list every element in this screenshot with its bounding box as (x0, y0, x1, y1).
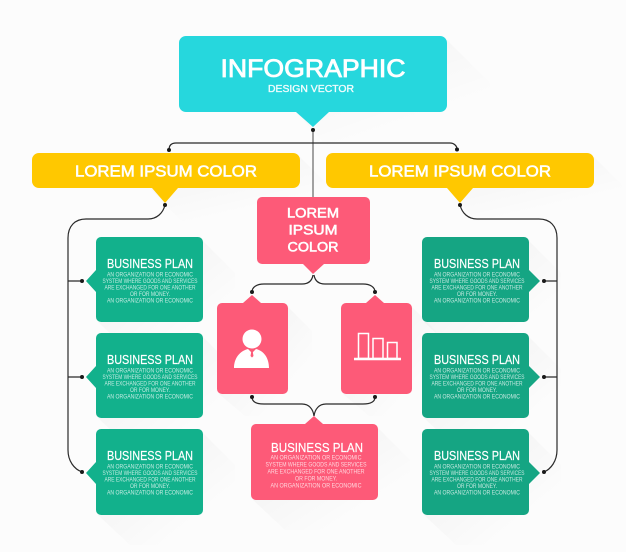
title: INFOGRAPHIC (220, 55, 406, 83)
icon: bar chart (354, 334, 401, 359)
panel: left business plan 2: ARE EXCHANGED FOR ONE ANOTHER (104, 380, 196, 388)
panel: bottom pink business plan: ARE EXCHANGED FOR ONE ANOTHER (268, 468, 365, 476)
panel: left business plan 3: AN ORGANIZATION OR ECONOMIC (107, 490, 193, 496)
panel: right business plan 1: BUSINESS PLAN (434, 256, 520, 271)
panel: left business plan 3: BUSINESS PLAN (107, 448, 193, 463)
panel: left business plan 3: OR FOR MONEY. (130, 483, 170, 490)
panel: centre pink heading (257, 197, 370, 274)
panel: left business plan 2 (86, 333, 203, 418)
panel: left business plan 2: BUSINESS PLAN (107, 352, 193, 367)
panel: left yellow heading: LOREM IPSUM COLOR (75, 164, 257, 180)
title box (179, 36, 447, 127)
panel: right business plan 3: SYSTEM WHERE GOODS AND SERVICES (430, 470, 525, 477)
panel: right yellow heading (326, 153, 594, 203)
panel: left business plan 1: SYSTEM WHERE GOODS AND SERVICES (102, 278, 198, 285)
connector dots (80, 128, 546, 474)
panel: right business plan 1: AN ORGANIZATION OR ECONOMIC (434, 272, 520, 278)
panel: right business plan 2: BUSINESS PLAN (434, 352, 520, 367)
panel: bottom pink business plan (251, 416, 378, 500)
panel: left yellow heading (32, 153, 300, 203)
panel: right business plan 2: AN ORGANIZATION OR ECONOMIC (434, 368, 520, 374)
panel: left business plan 1: AN ORGANIZATION OR ECONOMIC (107, 298, 193, 304)
panel: right business plan 2: ARE EXCHANGED FOR ONE ANOTHER (432, 380, 523, 388)
panel: right business plan 2: SYSTEM WHERE GOODS AND SERVICES (430, 374, 525, 381)
panel: left business plan 2: SYSTEM WHERE GOODS AND SERVICES (102, 374, 198, 381)
panel: left business plan 3: SYSTEM WHERE GOODS AND SERVICES (102, 470, 198, 477)
panel: left business plan 1: ARE EXCHANGED FOR ONE ANOTHER (104, 284, 196, 292)
panel: bottom pink business plan: AN ORGANIZATION OR ECONOMIC (270, 482, 362, 490)
panel: centre pink heading: LOREM (287, 206, 339, 220)
panel: left business plan 2: AN ORGANIZATION OR ECONOMIC (107, 368, 193, 374)
panel: left business plan 3: AN ORGANIZATION OR ECONOMIC (107, 464, 193, 470)
panel: right business plan 2: OR FOR MONEY. (457, 387, 497, 394)
panel: right business plan 3: ARE EXCHANGED FOR ONE ANOTHER (432, 476, 523, 484)
panel: right business plan 1 (422, 237, 540, 322)
panel: right business plan 3 (422, 429, 540, 515)
connector lines (68, 130, 557, 472)
panel: left business plan 1 (86, 237, 203, 322)
panel: bottom pink business plan: SYSTEM WHERE GOODS AND SERVICES (266, 462, 367, 468)
panel: left business plan 3 (86, 429, 203, 515)
panel: centre pink heading: IPSUM (288, 222, 338, 238)
panel: bottom pink business plan: OR FOR MONEY. (295, 476, 337, 482)
panel: right business plan 1: OR FOR MONEY. (457, 291, 497, 298)
panel: right business plan 3: AN ORGANIZATION OR ECONOMIC (434, 490, 520, 496)
panel: right business plan 1: AN ORGANIZATION OR ECONOMIC (434, 298, 520, 304)
panel: right business plan 3: BUSINESS PLAN (434, 448, 520, 463)
subtitle: DESIGN VECTOR (268, 84, 354, 95)
panel: right business plan 2 (422, 333, 540, 418)
panel: right business plan 1: ARE EXCHANGED FOR ONE ANOTHER (432, 284, 523, 292)
panel: centre pink heading: COLOR (288, 240, 339, 254)
panel: person card (217, 295, 288, 394)
panel: right business plan 3: AN ORGANIZATION OR ECONOMIC (434, 464, 520, 470)
panel: left business plan 2: OR FOR MONEY. (130, 387, 170, 394)
panel: bottom pink business plan: AN ORGANIZATION OR ECONOMIC (270, 454, 362, 462)
panel: left business plan 1: OR FOR MONEY. (130, 291, 170, 298)
panel: chart card (341, 295, 412, 394)
panel: right business plan 2: AN ORGANIZATION OR ECONOMIC (434, 394, 520, 400)
icon: person (234, 330, 269, 368)
panel: left business plan 3: ARE EXCHANGED FOR ONE ANOTHER (104, 476, 196, 484)
panel: left business plan 2: AN ORGANIZATION OR ECONOMIC (107, 394, 193, 400)
panel: left business plan 1: BUSINESS PLAN (107, 256, 193, 271)
panel: right yellow heading: LOREM IPSUM COLOR (369, 164, 551, 180)
panel: left business plan 1: AN ORGANIZATION OR ECONOMIC (107, 272, 193, 278)
panel: bottom pink business plan: BUSINESS PLAN (271, 440, 363, 455)
panel: right business plan 1: SYSTEM WHERE GOODS AND SERVICES (430, 278, 525, 285)
panel: right business plan 3: OR FOR MONEY. (457, 483, 497, 490)
